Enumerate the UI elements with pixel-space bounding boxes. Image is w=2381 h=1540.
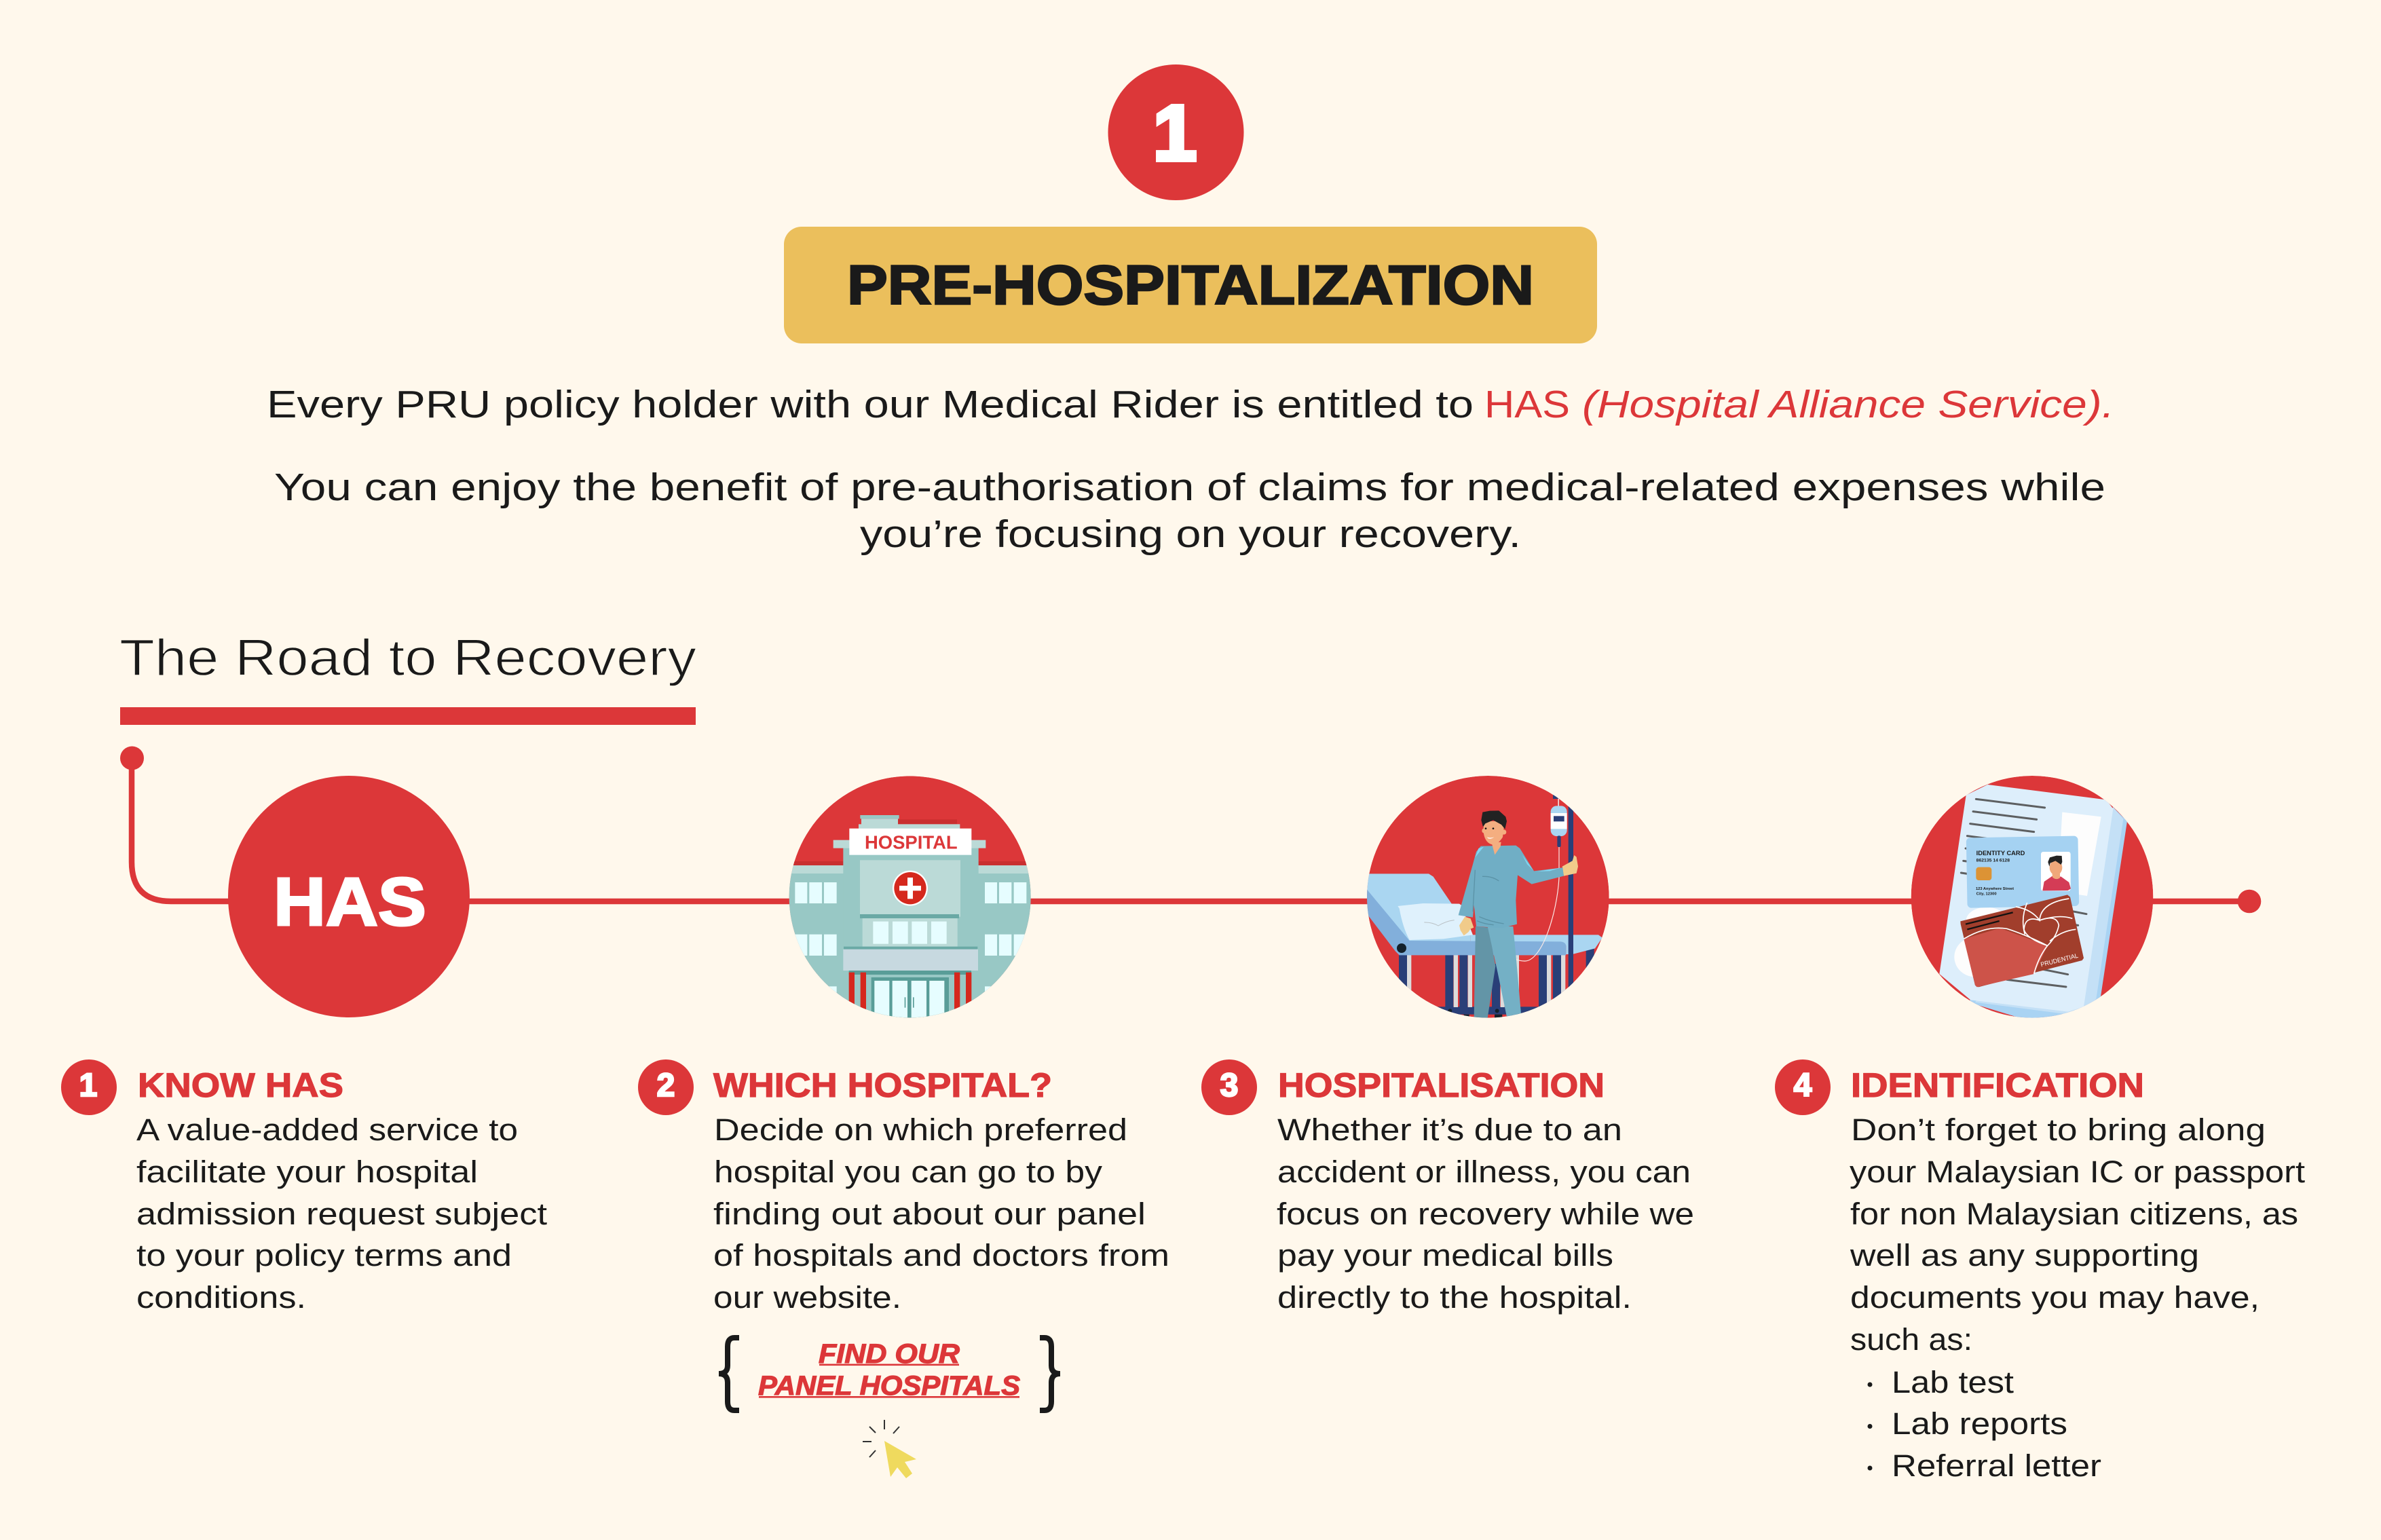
step 4 body text: for non Malaysian citizens, as [1850, 1197, 2298, 1231]
step 2 body text: Decide on which preferred [714, 1112, 1127, 1147]
step 2 body text: finding out about our panel [713, 1197, 1146, 1231]
step 4: identification [1775, 1059, 2306, 1483]
icon: patient beside hospital bed with IV drip [1366, 776, 1609, 1023]
step 2 body text: our website. [713, 1280, 901, 1315]
intro text: HAS entitlement: HAS [1484, 383, 1570, 426]
heading: the road to recovery [119, 629, 696, 725]
intro text: HAS entitlement: (Hospital Alliance Service). [1582, 383, 2114, 426]
step 4 bullet list: Lab reports [1892, 1406, 2067, 1441]
link: find our panel hospitals [719, 1338, 1060, 1410]
step 1 body text: admission request subject [136, 1197, 548, 1231]
intro text: HAS entitlement [267, 383, 2114, 426]
timeline connector line [120, 747, 2261, 913]
intro text: pre-authorisation benefit [274, 466, 2105, 556]
step 3 body text: accident or illness, you can [1277, 1154, 1691, 1189]
step 2 body text: of hospitals and doctors from [713, 1238, 1169, 1273]
step 1 body text: to your policy terms and [136, 1238, 512, 1273]
step 4 body text: your Malaysian IC or passport [1850, 1154, 2306, 1189]
section number badge: 1 [1153, 89, 1197, 177]
link: find our panel hospitals: PANEL HOSPITALS [758, 1371, 1020, 1401]
icon: HAS circle [228, 776, 470, 1017]
step 1 body text [136, 1112, 548, 1315]
link: find our panel hospitals: FIND OUR [819, 1339, 960, 1369]
step 3 body text: directly to the hospital. [1277, 1280, 1632, 1315]
step 1: know HAS [61, 1059, 548, 1315]
step 4 bullet list: Referral letter [1892, 1448, 2101, 1483]
step 4 body text [1850, 1112, 2306, 1357]
step 4 body text: such as: [1850, 1322, 1972, 1357]
step 3 number badge: 3 [1220, 1068, 1238, 1104]
title banner: pre-hospitalization: PRE-HOSPITALIZATION [847, 255, 1534, 316]
step 1 heading: KNOW HAS [138, 1066, 343, 1104]
step 3 body text: focus on recovery while we [1277, 1197, 1694, 1231]
step 4 body text: Don’t forget to bring along [1851, 1112, 2266, 1147]
step 4 bullet list: Lab test [1892, 1365, 2014, 1400]
step 2: which hospital [638, 1059, 1169, 1478]
step 1 body text: A value-added service to [136, 1112, 518, 1147]
heading: the road to recovery: The Road to Recovery [119, 629, 696, 687]
icon: identity documents and medical card: 862135 14 6128 [1976, 858, 2010, 863]
step 2 body text: hospital you can go to by [714, 1154, 1103, 1189]
step 3 heading: HOSPITALISATION [1278, 1066, 1605, 1104]
icon: identity documents and medical card: IDENTITY CARD [1976, 850, 2025, 857]
icon: identity documents and medical card: City, 12300 [1976, 892, 1997, 896]
section number badge [1108, 64, 1243, 200]
step 4 body text: well as any supporting [1850, 1238, 2199, 1273]
intro text: pre-authorisation benefit: You can enjoy the benefit of pre-authorisation of claims for medical-related expenses while [274, 466, 2105, 509]
icon: click cursor [863, 1420, 916, 1478]
title banner: pre-hospitalization [784, 227, 1597, 343]
step 2 number badge: 2 [657, 1068, 675, 1104]
intro text: pre-authorisation benefit: you’re focusing on your recovery. [860, 512, 1521, 556]
step 4 number badge [1775, 1059, 1831, 1115]
step 1 number badge [61, 1059, 117, 1115]
step 3 body text: Whether it’s due to an [1277, 1112, 1622, 1147]
step 4 number badge: 4 [1794, 1068, 1812, 1104]
step 2 number badge [638, 1059, 694, 1115]
icon: hospital building: HOSPITAL [865, 832, 958, 853]
intro text: HAS entitlement: Every PRU policy holder with our Medical Rider is entitled to [267, 383, 1474, 426]
step 3 body text: pay your medical bills [1277, 1238, 1613, 1273]
step 2 heading: WHICH HOSPITAL? [713, 1066, 1052, 1104]
icon: identity documents and medical card [1911, 776, 2153, 1018]
step 1 body text: facilitate your hospital [136, 1154, 478, 1189]
step 3 number badge [1201, 1059, 1257, 1115]
step 3: hospitalisation [1201, 1059, 1694, 1315]
step 2 body text [713, 1112, 1169, 1315]
icon: HAS circle: HAS [274, 864, 426, 940]
step 1 number badge: 1 [79, 1068, 97, 1104]
icon: identity documents and medical card: PRUDENTIAL [2040, 952, 2079, 968]
step 4 heading: IDENTIFICATION [1851, 1066, 2144, 1104]
icon: hospital building [789, 776, 1032, 1021]
icon: identity documents and medical card: 123 Anywhere Street [1976, 887, 2014, 891]
step 4 bullet list [1868, 1365, 2101, 1483]
step 3 body text [1277, 1112, 1694, 1315]
step 1 body text: conditions. [136, 1280, 306, 1315]
step 4 body text: documents you may have, [1850, 1280, 2260, 1315]
